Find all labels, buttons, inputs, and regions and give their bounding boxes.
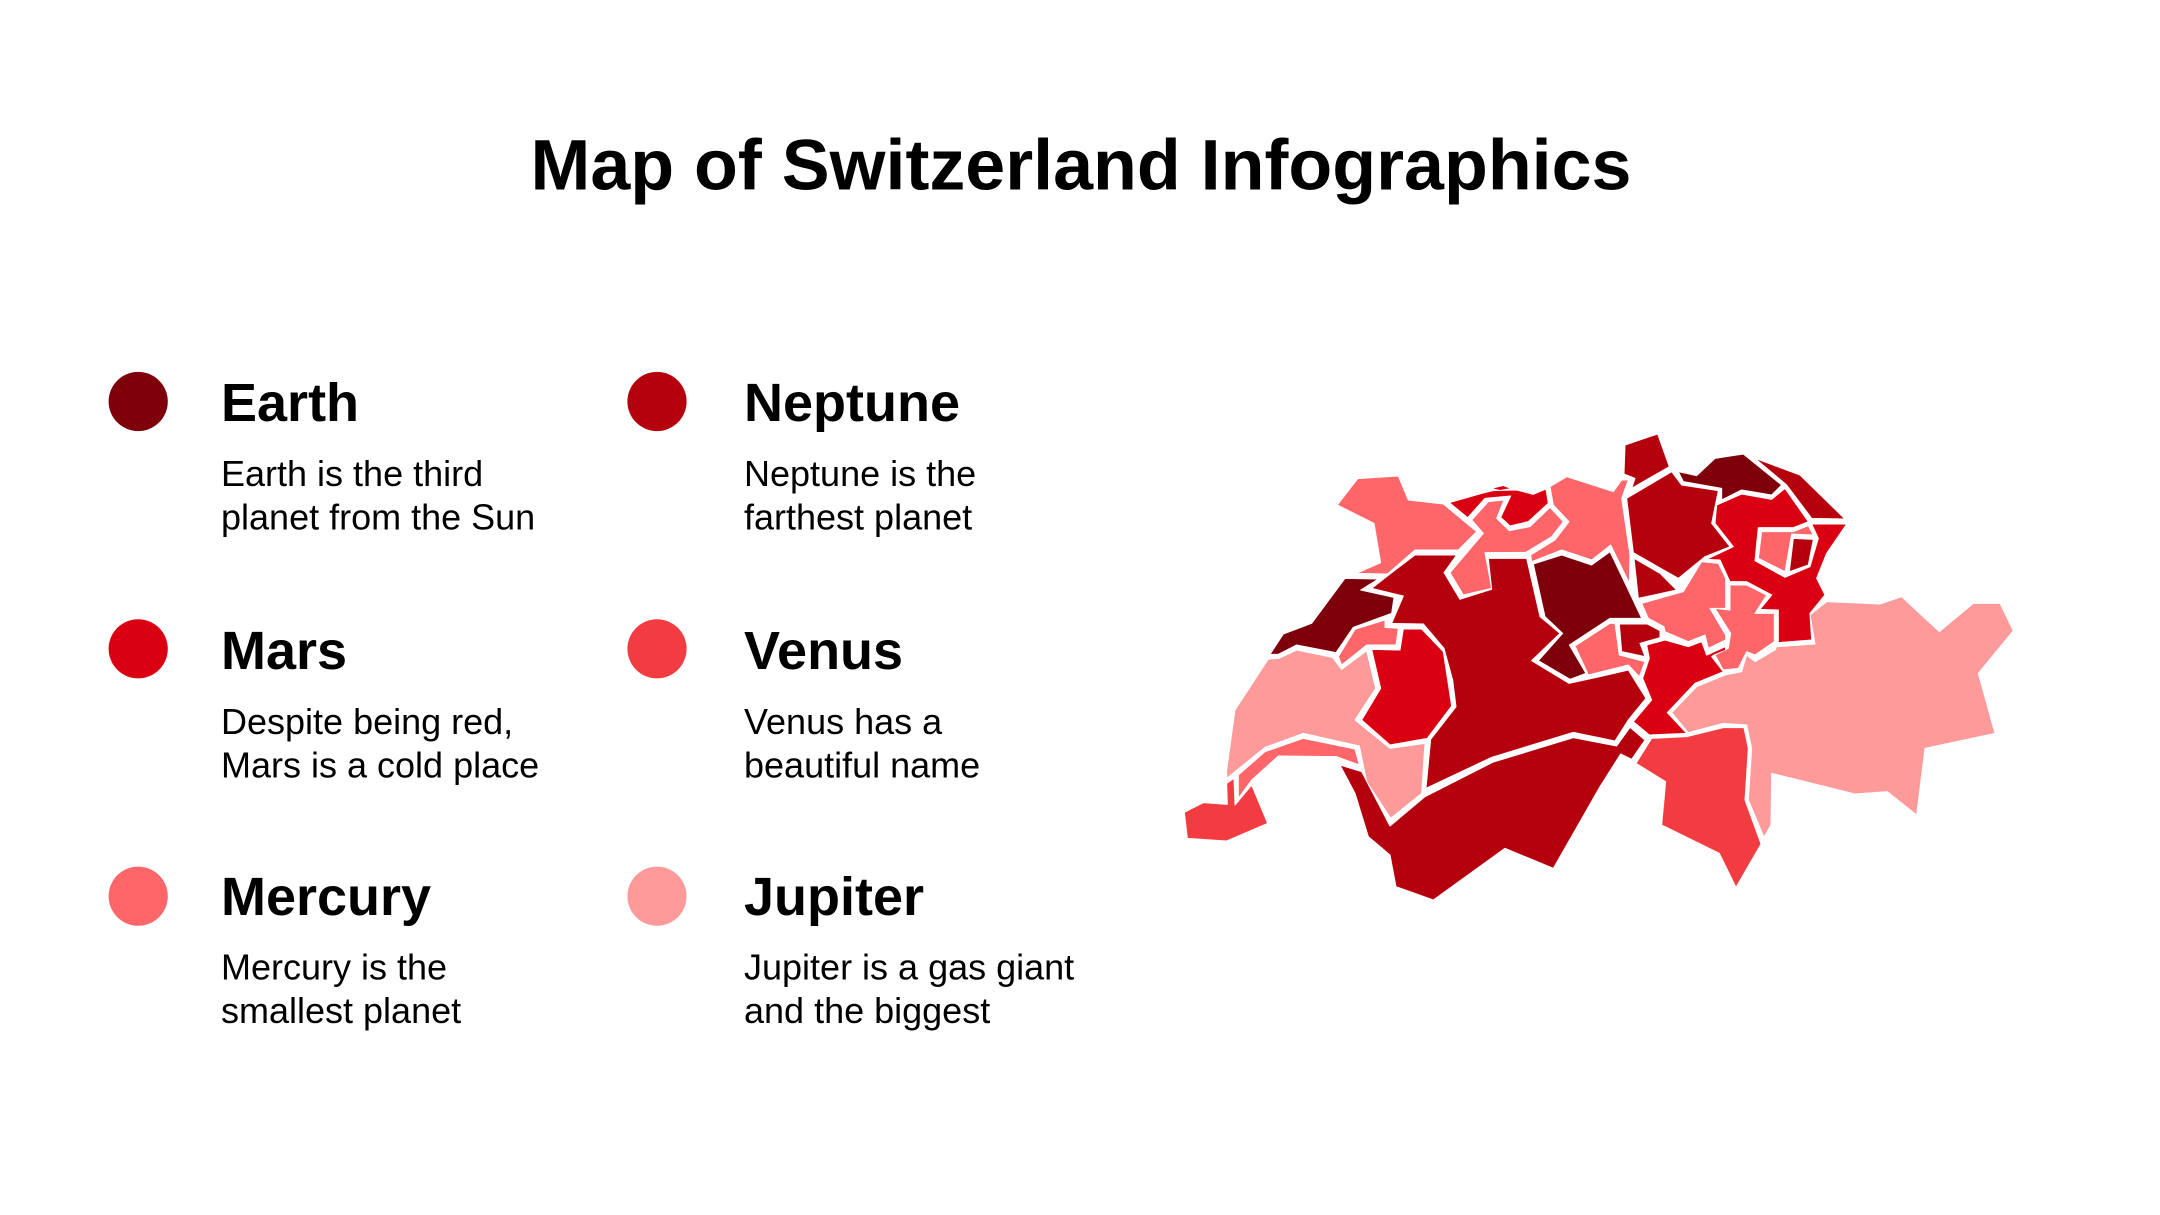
region: Geneva (Venus) xyxy=(1184,778,1268,841)
text: Earth description: Earth is the third xyxy=(221,453,483,494)
region: north sliver (Mars) xyxy=(1493,486,1509,490)
icon: Jupiter dot xyxy=(627,867,687,926)
text: Venus description: Venus has a xyxy=(744,701,942,742)
region: small west (Mercury) xyxy=(1338,620,1398,665)
icon: Earth dot xyxy=(109,372,168,431)
legend item: Jupiter xyxy=(627,867,1074,1031)
heading: Neptune: Neptune xyxy=(744,373,960,433)
heading: Earth: Earth xyxy=(221,373,359,433)
legend item: Venus xyxy=(627,619,980,785)
text: Earth description: planet from the Sun xyxy=(221,497,535,538)
region: lake strip (Mercury) xyxy=(1238,738,1359,798)
legend item: Neptune xyxy=(627,372,976,538)
region: central sliver (Mars) xyxy=(1712,647,1725,655)
text: Mars description: Mars is a cold place xyxy=(221,744,539,785)
region: Schaffhausen (Neptune) xyxy=(1624,434,1669,488)
region: Lucerne (Earth) xyxy=(1533,552,1642,679)
icon: Venus dot xyxy=(627,619,687,678)
region: Uri (Mars) xyxy=(1633,640,1723,735)
region: north-west (Mercury) xyxy=(1337,476,1477,574)
region: Fribourg (Mars) xyxy=(1362,629,1452,745)
map of Switzerland xyxy=(1184,434,2013,900)
text: Mars description: Despite being red, xyxy=(221,701,513,742)
heading: Mercury: Mercury xyxy=(221,867,431,927)
legend item: Mars xyxy=(109,619,539,785)
region: Glarus (Mercury) xyxy=(1715,585,1774,670)
text: Neptune description: farthest planet xyxy=(744,497,972,538)
region: Thurgau (Earth) xyxy=(1678,454,1782,500)
icon: Mercury dot xyxy=(109,867,168,926)
text: Mercury description: Mercury is the xyxy=(221,946,447,987)
region: Appenzell Innerrhoden (Neptune) xyxy=(1789,538,1813,572)
region: Ticino (Venus) xyxy=(1636,728,1761,887)
heading: Jupiter: Jupiter xyxy=(744,867,924,927)
region: Obwalden (Neptune) xyxy=(1619,624,1660,657)
region: Nidwalden (Mercury) xyxy=(1575,623,1645,677)
region: Solothurn (Mercury) xyxy=(1450,500,1563,595)
text: Venus description: beautiful name xyxy=(744,744,980,785)
legend item: Earth xyxy=(109,372,535,538)
legend item: Mercury xyxy=(109,867,461,1031)
region: St Gallen (Mars) xyxy=(1707,488,1847,643)
text: Jupiter description: and the biggest xyxy=(744,990,990,1031)
icon: Mars dot xyxy=(109,619,168,678)
region: Valais (Neptune) xyxy=(1340,727,1645,900)
region: Aargau (Mercury) xyxy=(1531,477,1630,583)
region: Zurich south (Neptune) xyxy=(1634,558,1677,598)
heading: Mars: Mars xyxy=(221,621,347,681)
text: Mercury description: smallest planet xyxy=(221,990,461,1031)
region: Vaud (Jupiter) xyxy=(1227,650,1425,818)
region: Graubunden (Jupiter) xyxy=(1672,597,2013,837)
region: Bodensee edge (Neptune) xyxy=(1755,458,1845,519)
region: Bern (Neptune) xyxy=(1372,555,1646,788)
region: Schwyz (Mercury) xyxy=(1642,562,1726,648)
title: Map of Switzerland Infographics xyxy=(531,126,1631,206)
text: Neptune description: Neptune is the xyxy=(744,453,976,494)
region: Neuchatel (Earth) xyxy=(1270,578,1394,654)
region: Appenzell Ausserrhoden (Mercury) xyxy=(1758,526,1813,572)
heading: Venus: Venus xyxy=(744,621,903,681)
region: north strip (Mars) xyxy=(1449,489,1548,526)
region: Zurich (Neptune) xyxy=(1627,472,1730,578)
text: Jupiter description: Jupiter is a gas giant xyxy=(744,946,1074,987)
icon: Neptune dot xyxy=(627,372,687,431)
